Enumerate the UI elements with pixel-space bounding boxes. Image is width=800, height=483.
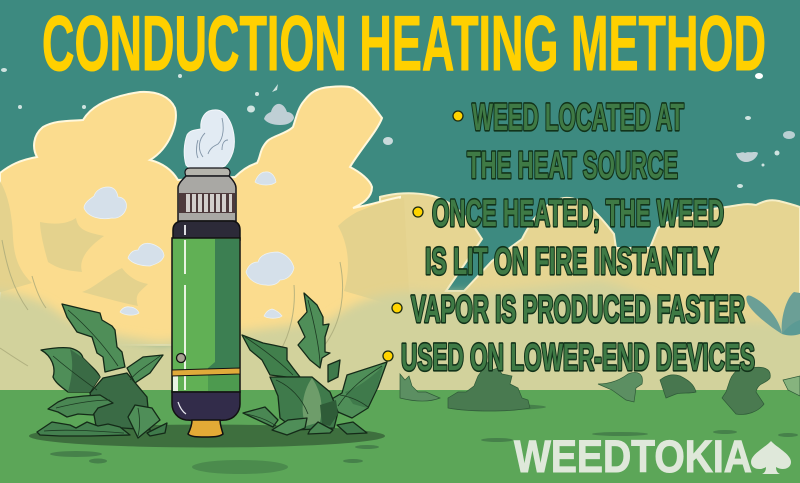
small ground shadows	[50, 404, 798, 474]
metal head	[178, 176, 236, 221]
watermark logo: WEEDTOKIA	[514, 431, 752, 482]
yellow clouds	[0, 86, 402, 345]
ground	[0, 390, 800, 483]
cloud: right of pen	[246, 252, 294, 285]
yellow cloud shading	[0, 178, 410, 310]
cloud: left of pen	[128, 243, 164, 266]
distant bushes	[400, 362, 800, 415]
distant teal plant	[746, 292, 800, 336]
leaf: right small	[328, 360, 340, 382]
dark collar	[173, 221, 240, 240]
cloud: left large	[84, 187, 127, 219]
leaf: left spiky	[48, 395, 113, 417]
leaf: left sprig	[242, 335, 300, 377]
cloud: small left	[120, 307, 139, 315]
leaf: bottom spiky	[37, 422, 130, 436]
bullet list	[383, 97, 755, 379]
cloud: small right	[264, 309, 282, 318]
leaf: upper left	[62, 304, 125, 372]
bullet 1	[453, 97, 684, 187]
leaf: lower left	[243, 407, 278, 427]
cloud: near pen head	[255, 172, 276, 185]
leaf: left large	[41, 348, 100, 392]
leaf: bottom	[272, 418, 307, 435]
body button	[176, 354, 186, 362]
ground shadow	[29, 424, 385, 448]
leaf: centre mass	[270, 377, 338, 430]
icon: spade	[751, 441, 791, 474]
leaf: right	[127, 355, 163, 383]
leaf: centre cluster	[90, 373, 150, 430]
battery base	[172, 392, 240, 421]
sky specks	[1, 68, 795, 188]
leaf: upper centre	[298, 293, 330, 368]
distant hills	[380, 193, 800, 483]
cap	[185, 168, 230, 176]
gold band	[172, 368, 240, 376]
vapor plume	[184, 110, 234, 169]
leaf: lower right	[128, 405, 160, 438]
gold tip	[188, 420, 223, 437]
small clouds on the yellow	[84, 172, 294, 318]
vape pen	[172, 110, 240, 437]
bullet 2	[413, 193, 724, 283]
small cloud: sky right	[736, 152, 758, 162]
pale lower meadow band	[0, 280, 800, 410]
left plant	[37, 304, 167, 438]
faint arcs	[0, 240, 343, 366]
heater grille	[186, 194, 232, 212]
body	[172, 238, 240, 392]
small cloud: top	[264, 104, 294, 125]
leaf: right large	[330, 362, 387, 418]
right plant	[242, 293, 387, 435]
